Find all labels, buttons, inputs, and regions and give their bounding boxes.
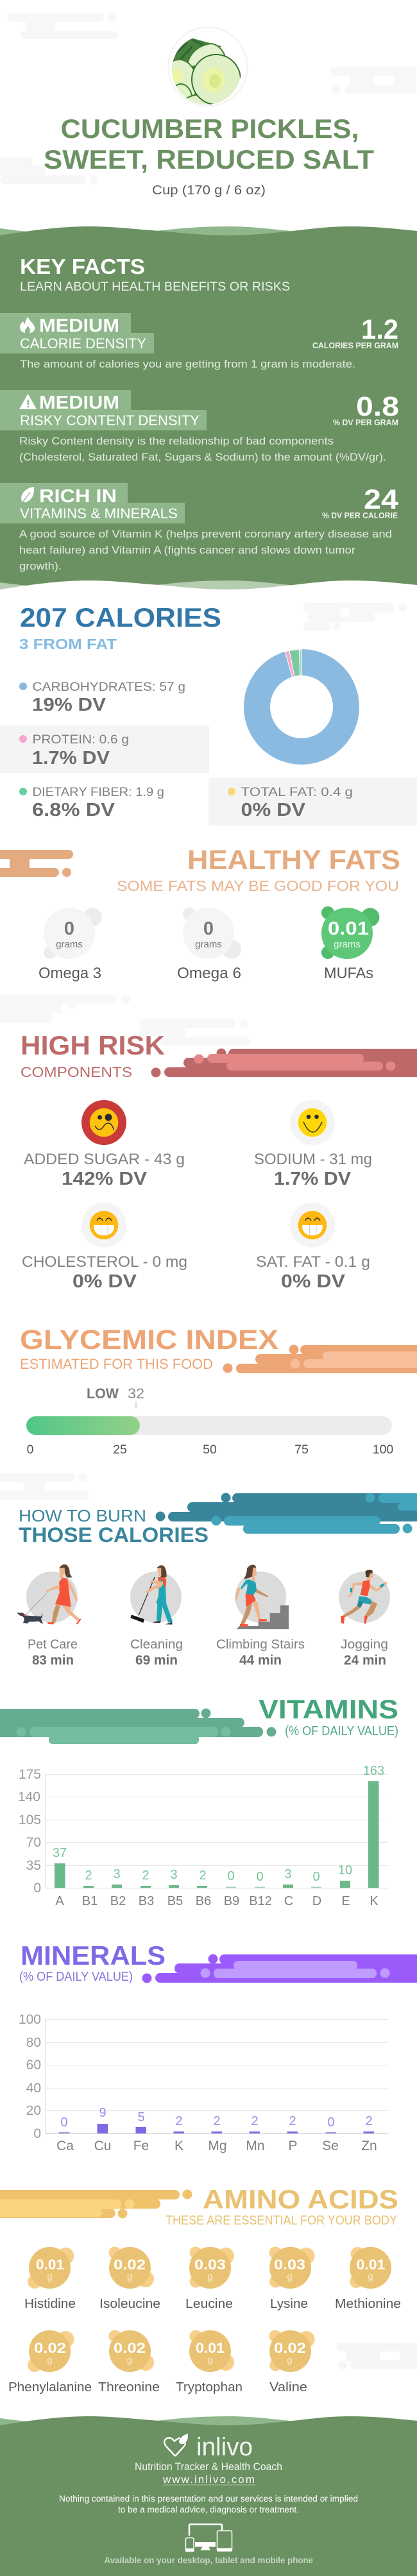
component: sodium: 1.7% DV <box>274 1169 352 1189</box>
badge: omega 3: 0 <box>64 919 74 939</box>
activity: jogging: 24 min <box>344 1653 386 1668</box>
bar chart: minerals: 0 <box>327 2115 335 2130</box>
bar chart: vitamins: 3 <box>113 1867 121 1881</box>
bar chart: vitamins: 10 <box>338 1863 352 1877</box>
bar chart: vitamins: B5 <box>167 1894 183 1908</box>
green wave background <box>0 226 417 593</box>
bar chart: vitamins <box>18 1764 388 1908</box>
icon: devices <box>185 2525 232 2552</box>
heading: how to burn: HOW TO BURN <box>19 1506 146 1525</box>
panel: amino acids <box>0 2184 417 2394</box>
legend: protein: 1.7% DV <box>32 748 110 768</box>
component: added sugar: 142% DV <box>62 1169 148 1189</box>
subheading: amino acids: THESE ARE ESSENTIAL FOR YOUR BODY <box>166 2214 397 2228</box>
gauge: glycemic index value: LOW <box>87 1385 119 1402</box>
badge: threonine: 0.02 <box>114 2340 146 2356</box>
fact: calorie density: CALORIE DENSITY <box>20 335 146 352</box>
subheading: percent of daily value: (% OF DAILY VALUE) <box>285 1724 398 1738</box>
component: cholesterol <box>22 1203 187 1292</box>
badge: valine: 0.02 <box>274 2340 306 2356</box>
fact: rich in vitamins and minerals: RICH IN <box>39 486 117 507</box>
badge: omega 6: Omega 6 <box>177 965 241 982</box>
badge: leucine: Leucine <box>185 2297 233 2311</box>
fact: rich in vitamins and minerals: growth). <box>19 560 62 572</box>
legend: protein: PROTEIN: 0.6 g <box>32 733 129 747</box>
decorative band: vitamins <box>0 1709 276 1744</box>
badge: valine: g <box>287 2355 293 2366</box>
bar chart: vitamins: B6 <box>196 1894 211 1908</box>
badge: leucine: g <box>207 2271 213 2282</box>
bar chart: vitamins: B3 <box>139 1894 154 1908</box>
subheading: percent of daily value: (% OF DAILY VALUE) <box>19 1970 133 1984</box>
panel: high risk components <box>0 995 417 1292</box>
bar chart: vitamins: B12 <box>249 1894 272 1908</box>
legend: total fat <box>208 778 417 826</box>
panel: calories <box>0 602 417 826</box>
icon: grinning face <box>290 1203 335 1248</box>
badge: lysine: Lysine <box>270 2297 308 2311</box>
bar chart: minerals: 0 <box>60 2115 68 2130</box>
badge: methionine: Methionine <box>335 2297 401 2311</box>
activity: climbing stairs: Climbing Stairs <box>216 1638 305 1652</box>
badge: histidine: 0.01 <box>36 2257 64 2273</box>
bar chart: minerals: 40 <box>26 2081 41 2096</box>
panel: healthy fats <box>0 845 400 982</box>
badge: methionine <box>335 2247 401 2311</box>
subheading: glycemic index: ESTIMATED FOR THIS FOOD <box>20 1356 213 1372</box>
badge: omega 6: grams <box>195 939 222 950</box>
bar chart: vitamins: E <box>341 1894 350 1908</box>
heading: vitamins: VITAMINS <box>259 1694 398 1724</box>
donut chart: macronutrients <box>257 649 346 752</box>
activity: pet care: 83 min <box>32 1653 74 1668</box>
badge: omega 3: Omega 3 <box>38 965 101 982</box>
food photo: cucumber slices <box>168 27 248 106</box>
icon: smiling face <box>290 1100 335 1145</box>
component: sodium <box>254 1100 372 1189</box>
badge: MUFAs <box>321 906 380 982</box>
availability note: Available on your desktop, tablet and mobile phone <box>104 2555 313 2565</box>
decorative band: minerals <box>142 1954 417 1983</box>
badge: lysine: 0.03 <box>274 2257 305 2273</box>
bar chart: minerals: 60 <box>26 2058 41 2072</box>
legend: protein <box>0 725 209 773</box>
heading: calories: 207 CALORIES <box>20 602 221 632</box>
activity: climbing stairs: 44 min <box>239 1653 282 1668</box>
gauge: glycemic index value: 0 <box>27 1443 34 1457</box>
badge: leucine <box>185 2246 234 2311</box>
badge: tryptophan: Tryptophan <box>176 2380 243 2394</box>
activity: jogging <box>339 1570 390 1668</box>
icon: warning triangle <box>19 394 37 409</box>
component: saturated fat: SAT. FAT - 0.1 g <box>256 1253 370 1271</box>
badge: valine <box>269 2330 314 2394</box>
component: cholesterol: CHOLESTEROL - 0 mg <box>22 1253 187 1271</box>
legend: dietary fiber: 6.8% DV <box>32 800 115 820</box>
bar chart: vitamins: 2 <box>142 1868 149 1883</box>
gauge: glycemic index value: 50 <box>203 1443 217 1457</box>
panel: footer <box>0 2416 417 2576</box>
badge: lysine: g <box>287 2271 293 2282</box>
bar chart: vitamins: K <box>370 1894 379 1908</box>
legend: carbohydrates: CARBOHYDRATES: 57 g <box>32 680 185 694</box>
bar chart: minerals: 2 <box>213 2114 221 2128</box>
gauge: glycemic index value <box>26 1385 393 1457</box>
panel: glycemic index <box>20 1325 417 1457</box>
bar chart: minerals: 20 <box>26 2103 41 2118</box>
panel: vitamins <box>0 1694 398 1908</box>
panel: how to burn those calories <box>0 1473 417 1668</box>
fact: risky content density: RISKY CONTENT DENSITY <box>20 412 200 428</box>
heading: healthy fats: HEALTHY FATS <box>187 845 400 876</box>
decorative band: healthy fats <box>0 850 73 877</box>
bar chart: minerals: 2 <box>289 2114 296 2128</box>
fact: rich in vitamins and minerals <box>0 483 398 572</box>
subheading: components: COMPONENTS <box>21 1064 132 1080</box>
bar chart: minerals: Cu <box>94 2139 111 2153</box>
bar chart: vitamins: 2 <box>199 1868 207 1883</box>
bar chart: vitamins: 140 <box>18 1790 40 1804</box>
decorative band: amino acids <box>0 2190 192 2218</box>
fact: risky content density <box>0 390 399 463</box>
badge: histidine: g <box>47 2271 53 2282</box>
heading: key facts: KEY FACTS <box>20 255 145 278</box>
bar chart: vitamins: 163 <box>363 1764 384 1778</box>
badge: threonine: Threonine <box>98 2380 160 2394</box>
activity: jogging: Jogging <box>341 1638 388 1652</box>
heading: amino acids: AMINO ACIDS <box>203 2184 398 2214</box>
legend: carbohydrates <box>19 680 185 715</box>
badge: tryptophan: g <box>207 2355 213 2366</box>
disclaimer <box>59 2494 358 2514</box>
bar chart: vitamins: 0 <box>33 1881 41 1895</box>
badge: phenylalanine: Phenylalanine <box>8 2380 92 2394</box>
bar chart: minerals: 9 <box>99 2106 106 2120</box>
badge: tryptophan: 0.01 <box>196 2340 225 2356</box>
badge: phenylalanine: g <box>47 2355 53 2366</box>
bar chart: minerals: Fe <box>133 2139 149 2153</box>
decorative band: high risk <box>151 1048 417 1078</box>
fact: calorie density: 1.2 <box>361 314 398 345</box>
activity: cleaning: Cleaning <box>130 1638 183 1652</box>
gauge: glycemic index value: 75 <box>294 1443 309 1457</box>
fact: rich in vitamins and minerals: % DV PER CALORIE <box>322 511 398 520</box>
bar chart: vitamins: 0 <box>312 1870 320 1884</box>
background cloud: calories <box>303 603 407 631</box>
bar chart: minerals: Zn <box>361 2139 377 2153</box>
badge: isoleucine: g <box>127 2271 132 2282</box>
icon: woman climbing stairs <box>235 1565 289 1629</box>
bar chart: minerals: P <box>288 2139 298 2153</box>
logo: inlivo <box>164 2433 253 2461</box>
decorative band: glycemic index <box>223 1344 417 1373</box>
bar chart: minerals: 0 <box>33 2126 41 2141</box>
badge: histidine: Histidine <box>24 2297 76 2311</box>
fact: calorie density: The amount of calories you are getting from 1 gram is moderate. <box>20 358 355 370</box>
fact: risky content density: Risky Content density is the relationship of bad components <box>19 435 334 447</box>
panel: minerals <box>19 1940 417 2153</box>
fact: calorie density: MEDIUM <box>39 316 119 336</box>
badge: omega 3: grams <box>56 939 83 950</box>
bar chart: vitamins: 0 <box>256 1870 264 1884</box>
fact: rich in vitamins and minerals: VITAMINS & MINERALS <box>20 505 178 521</box>
badge: MUFAs: grams <box>334 939 361 950</box>
heading: high risk: HIGH RISK <box>21 1030 165 1060</box>
fact: risky content density: MEDIUM <box>39 393 119 413</box>
bar chart: vitamins: 2 <box>85 1868 92 1883</box>
heading: glycemic index: GLYCEMIC INDEX <box>20 1325 278 1355</box>
icon: man jogging <box>339 1570 390 1624</box>
bar chart: minerals: Se <box>322 2139 339 2153</box>
bar chart: minerals <box>19 2012 388 2153</box>
icon: woman walking dog <box>17 1564 81 1625</box>
disclaimer: Nothing contained in this presentation and our services is intended or implied <box>59 2494 358 2504</box>
bar chart: minerals: 5 <box>137 2110 145 2124</box>
badge: MUFAs: MUFAs <box>324 965 373 982</box>
badge: valine: Valine <box>269 2380 307 2394</box>
subheading: key facts: LEARN ABOUT HEALTH BENEFITS OR RISKS <box>20 280 290 294</box>
badge: histidine <box>24 2247 76 2311</box>
fact: rich in vitamins and minerals: heart failure) and Vitamin A (fights cancer and slows down tumor <box>19 544 355 556</box>
component: added sugar <box>24 1100 185 1189</box>
badge: omega 3 <box>38 908 101 982</box>
gauge: glycemic index value: 25 <box>113 1443 127 1457</box>
legend: dietary fiber <box>19 785 164 820</box>
fact: risky content density: (Cholesterol, Saturated Fat, Sugars & Sodium) to the amount (%DV/gr). <box>19 451 386 463</box>
badge: phenylalanine <box>8 2330 92 2394</box>
badge: isoleucine <box>99 2246 160 2311</box>
title: SWEET, REDUCED SALT <box>44 144 374 174</box>
badge: methionine: g <box>368 2271 373 2282</box>
fact: calorie density <box>0 313 398 370</box>
badge: leucine: 0.03 <box>194 2257 226 2273</box>
subheading: healthy fats: SOME FATS MAY BE GOOD FOR YOU <box>117 877 399 894</box>
icon: flame <box>20 317 35 333</box>
activity: pet care: Pet Care <box>28 1638 78 1652</box>
bar chart: vitamins: 70 <box>26 1835 41 1850</box>
bar chart: vitamins: D <box>312 1894 321 1908</box>
logo: inlivo: inlivo <box>196 2433 253 2461</box>
bar chart: minerals: Mg <box>208 2139 227 2153</box>
icon: worried face <box>81 1100 126 1145</box>
activity: climbing stairs <box>216 1565 305 1668</box>
activity: cleaning: 69 min <box>135 1653 178 1668</box>
bar chart: vitamins: 35 <box>26 1858 41 1873</box>
bar chart: vitamins: 3 <box>284 1867 292 1881</box>
component: saturated fat: 0% DV <box>281 1271 346 1292</box>
component: saturated fat <box>256 1203 370 1292</box>
badge: threonine <box>98 2330 160 2394</box>
title <box>44 114 374 174</box>
bar chart: vitamins: 105 <box>19 1813 41 1827</box>
badge: omega 6 <box>177 908 241 982</box>
component: sodium: SODIUM - 31 mg <box>254 1151 372 1168</box>
subheading: calories from fat: 3 FROM FAT <box>19 636 117 652</box>
badge: methionine: 0.01 <box>357 2257 385 2273</box>
tagline: Nutrition Tracker & Health Coach <box>135 2461 282 2473</box>
heading: those calories: THOSE CALORIES <box>19 1523 208 1546</box>
legend: carbohydrates: 19% DV <box>32 695 106 715</box>
bar chart: minerals: Mn <box>246 2139 265 2153</box>
bar chart: minerals: Ca <box>56 2139 74 2153</box>
bar chart: vitamins: B2 <box>110 1894 126 1908</box>
title: CUCUMBER PICKLES, <box>60 114 359 144</box>
icon: grinning face <box>81 1203 126 1248</box>
heading: minerals: MINERALS <box>21 1940 166 1970</box>
bar chart: minerals: 2 <box>365 2114 373 2128</box>
legend: total fat: 0% DV <box>241 800 306 820</box>
bar chart: vitamins: 0 <box>227 1869 235 1883</box>
legend: dietary fiber: DIETARY FIBER: 1.9 g <box>32 785 164 799</box>
bar chart: minerals: 80 <box>26 2035 41 2050</box>
badge: isoleucine: 0.02 <box>114 2257 146 2273</box>
bar chart: vitamins: 3 <box>170 1868 178 1882</box>
bar chart: minerals: 2 <box>251 2114 259 2128</box>
serving size: Cup (170 g / 6 oz) <box>152 183 266 198</box>
icon: person sweeping <box>130 1565 182 1625</box>
background cloud: amino acids <box>336 2343 417 2369</box>
bar chart: minerals: 100 <box>19 2012 41 2027</box>
component: cholesterol: 0% DV <box>72 1271 137 1292</box>
legend: total fat: TOTAL FAT: 0.4 g <box>241 785 353 799</box>
bar chart: minerals: K <box>174 2139 183 2153</box>
fact: rich in vitamins and minerals: A good source of Vitamin K (helps prevent coronary artery disease and <box>19 528 392 540</box>
badge: phenylalanine: 0.02 <box>34 2340 66 2356</box>
panel: key facts <box>0 226 417 593</box>
badge: lysine <box>269 2246 314 2311</box>
website link: www.inlivo.com <box>162 2473 255 2486</box>
fact: risky content density: 0.8 <box>356 391 399 422</box>
badge: threonine: g <box>127 2355 132 2366</box>
background clouds: header <box>0 13 417 185</box>
badge: omega 6: 0 <box>203 919 214 939</box>
icon: leaf <box>21 487 34 502</box>
bar chart: vitamins: B9 <box>224 1894 239 1908</box>
green wave background: footer <box>0 2416 417 2576</box>
disclaimer: to be a medical advice, diagnosis or treatment. <box>118 2505 299 2514</box>
activity: pet care <box>17 1564 81 1668</box>
badge: tryptophan <box>176 2330 243 2394</box>
decorative band: burn <box>155 1493 417 1534</box>
bar chart: vitamins: 37 <box>53 1846 67 1860</box>
bar chart: vitamins: A <box>55 1894 64 1908</box>
fact: rich in vitamins and minerals: 24 <box>364 484 398 515</box>
bar chart: vitamins: 175 <box>19 1767 41 1782</box>
component: added sugar: ADDED SUGAR - 43 g <box>24 1151 185 1168</box>
badge: isoleucine: Isoleucine <box>99 2297 160 2311</box>
gauge: glycemic index value: 32 <box>128 1385 144 1402</box>
fact: risky content density: % DV PER GRAM <box>333 418 398 427</box>
fact: calorie density: CALORIES PER GRAM <box>312 341 398 350</box>
badge: MUFAs: 0.01 <box>328 919 369 939</box>
gauge: glycemic index value: 100 <box>373 1443 393 1457</box>
bar chart: vitamins: B1 <box>82 1894 98 1908</box>
activity: cleaning <box>130 1565 183 1668</box>
background cloud: burn <box>0 1473 89 1500</box>
background clouds: high risk <box>0 995 250 1046</box>
bar chart: vitamins: C <box>284 1894 293 1908</box>
bar chart: minerals: 2 <box>175 2114 183 2128</box>
